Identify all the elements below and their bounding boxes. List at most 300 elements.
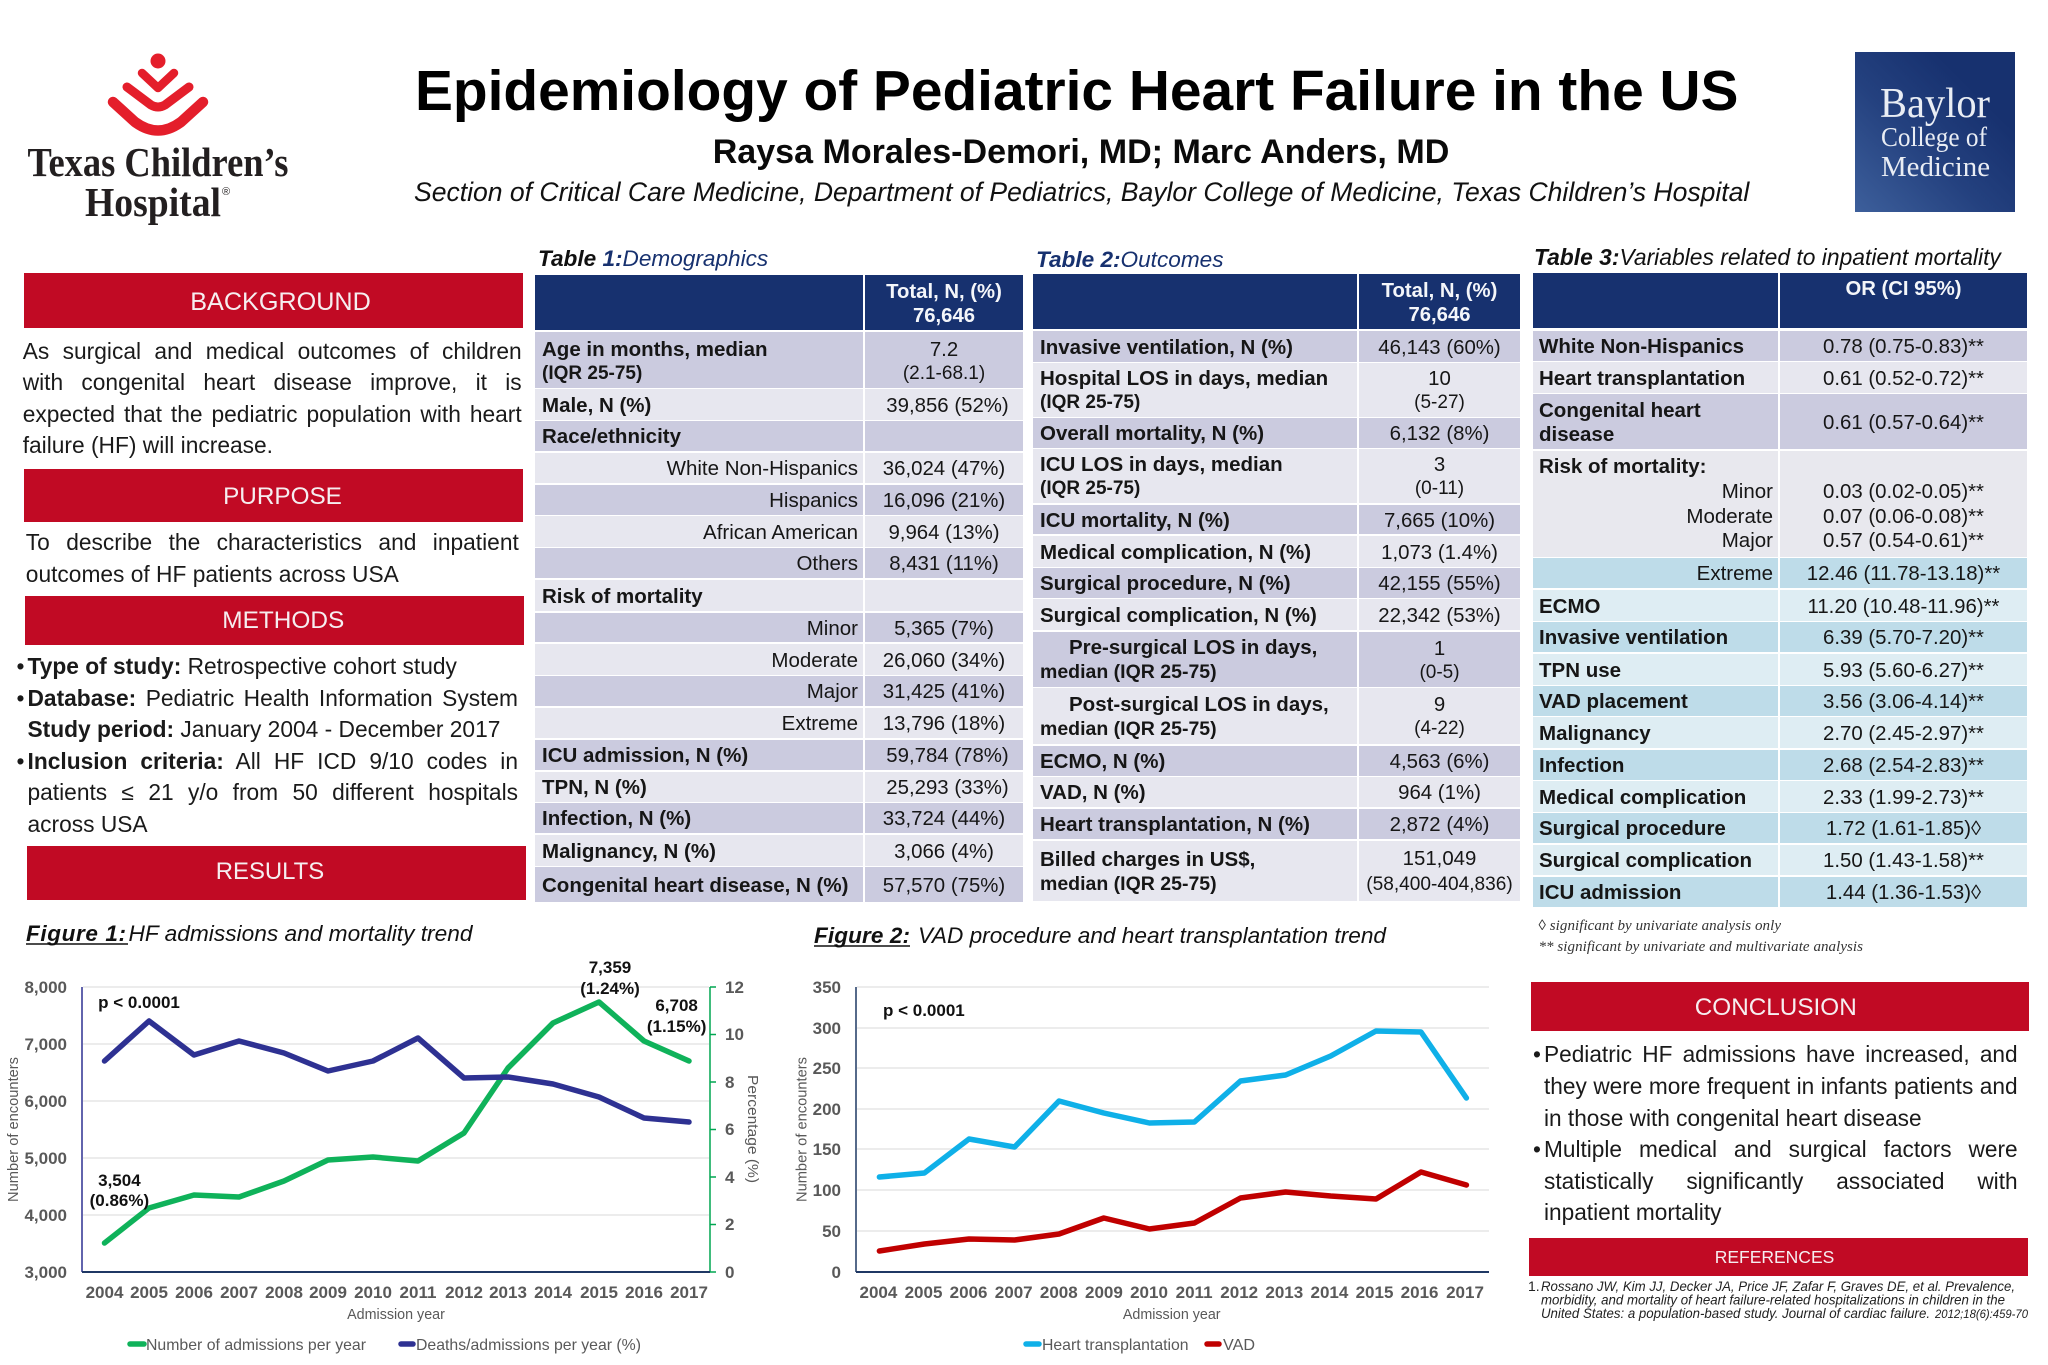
- row: hospital los: (5-27): [1414, 392, 1465, 413]
- text block: purpose: [26, 529, 519, 587]
- row: malignancy: 3,066 (4%): [894, 840, 994, 862]
- row: medical complication: 1,073 (1.4%): [1381, 542, 1498, 564]
- text block: background: expected that the pediatric population with heart: [23, 401, 522, 427]
- figure 2 title: Figure 2:: [814, 923, 910, 948]
- x axis: 2015: [580, 1283, 618, 1302]
- x axis: 2010: [354, 1283, 392, 1302]
- section heading: references: [1529, 1238, 2028, 1276]
- row: icu admission: ICU admission: [1539, 881, 1681, 904]
- x axis: 2013: [489, 1283, 527, 1302]
- row: pre-surgical los: 1: [1434, 638, 1445, 660]
- row: surgical complication: [1533, 845, 2027, 875]
- row: invasive ventilation: 46,143 (60%): [1378, 336, 1501, 358]
- row: icu los: (IQR 25-75): [1040, 478, 1140, 499]
- row: tpn: 25,293 (33%): [886, 777, 1009, 799]
- legend: [130, 1337, 641, 1354]
- y axis: 250: [813, 1059, 841, 1078]
- left axis: 6,000: [24, 1092, 67, 1111]
- row: white non-hispanics: White Non-Hispanics: [667, 457, 858, 480]
- logo: Baylor College of Medicine: [1855, 52, 2015, 212]
- right axis: 6: [725, 1120, 734, 1139]
- logo: Texas Children's Hospital: Texas Children’s: [28, 139, 288, 185]
- row: vad placement: VAD placement: [1539, 690, 1688, 713]
- row: risk of mortality: 0.07 (0.06-0.08)**: [1823, 506, 1984, 528]
- row: surgical complication: 22,342 (53%): [1378, 604, 1501, 626]
- annotations: [90, 958, 706, 1210]
- left axis: 5,000: [24, 1149, 67, 1168]
- logo: Baylor College of Medicine: Baylor: [1880, 81, 1990, 127]
- row: surgical complication: 1.50 (1.43-1.58)**: [1823, 850, 1984, 872]
- row: medical complication: 2.33 (1.99-2.73)**: [1823, 786, 1984, 808]
- row: malignancy: [1533, 717, 2027, 748]
- row: congenital heart disease: [535, 867, 1023, 902]
- row: post-surgical los: 9: [1434, 694, 1445, 716]
- chart: figure 2 VAD and heart transplantation: [785, 960, 1500, 1360]
- row: pre-surgical los: Pre-surgical LOS in days,: [1069, 636, 1317, 659]
- x axis: 2007: [995, 1283, 1033, 1302]
- row: post-surgical los: [1033, 688, 1520, 744]
- section heading: references: REFERENCES: [1715, 1247, 1834, 1267]
- logo: Texas Children's Hospital: [28, 54, 288, 225]
- x axis: 2004: [86, 1283, 124, 1302]
- row: major: 31,425 (41%): [883, 681, 1005, 703]
- row: congenital heart disease: 57,570 (75%): [883, 874, 1005, 896]
- left axis: 7,000: [24, 1035, 67, 1054]
- text block: methods: patients ≤ 21 y/o from 50 different hospitals: [28, 779, 518, 805]
- table 3: variables related to inpatient mortality: [1533, 273, 2027, 907]
- row: others: 8,431 (11%): [889, 553, 999, 575]
- x axis: 2008: [265, 1283, 303, 1302]
- text: •: [1533, 1136, 1541, 1162]
- annotations: 6,708: [655, 996, 698, 1015]
- row: white non-hispanics: White Non-Hispanics: [1539, 335, 1744, 358]
- row: risk of mortality: [1533, 451, 2027, 557]
- right axis: 4: [725, 1168, 735, 1187]
- row: surgical procedure: Surgical procedure, N (%): [1040, 572, 1291, 595]
- p value: p < 0.0001: [883, 1001, 965, 1020]
- row: risk of mortality: Risk of mortality: [542, 584, 703, 608]
- row: icu los: [1033, 449, 1520, 503]
- y axis: 200: [813, 1100, 841, 1119]
- row: infection: Infection, N (%): [542, 807, 691, 830]
- figure 1 title: [24, 918, 479, 950]
- row: risk of mortality: Risk of mortality:: [1539, 455, 1706, 478]
- row: hispanics: [535, 485, 1023, 515]
- x axis: 2016: [625, 1283, 663, 1302]
- row: invasive ventilation: [1533, 622, 2027, 652]
- x axis: 2012: [445, 1283, 483, 1302]
- x axis: 2013: [1265, 1283, 1303, 1302]
- row: extreme: Extreme: [782, 712, 858, 735]
- references text: morbidity, and mortality of heart failure-related hospitalizations in children in the: [1541, 1292, 2005, 1308]
- section heading: conclusion: [1530, 982, 2029, 1031]
- x axis: 2014: [1310, 1283, 1349, 1302]
- logo: Baylor College of Medicine: Medicine: [1881, 151, 1990, 183]
- row: ecmo: 4,563 (6%): [1390, 751, 1489, 773]
- row: white non-hispanics: [535, 453, 1023, 483]
- row: age: [535, 332, 1023, 388]
- text block: background: failure (HF) will increase.: [23, 432, 273, 458]
- row: surgical procedure: 1.72 (1.61-1.85)◊: [1826, 818, 1981, 840]
- axis titles: Percentage (%): [744, 1075, 761, 1183]
- legend: Number of admissions per year: [146, 1337, 366, 1354]
- row: minor: [535, 613, 1023, 642]
- row: race/ethnicity: Race/ethnicity: [542, 425, 681, 448]
- row: infection: 2.68 (2.54-2.83)**: [1823, 755, 1984, 777]
- axis titles: [795, 1057, 1221, 1323]
- row: overall mortality: 6,132 (8%): [1390, 423, 1489, 445]
- table 3 header: OR (CI 95%): [1845, 278, 1962, 300]
- row: tpn use: 5.93 (5.60-6.27)**: [1823, 660, 1984, 682]
- x axis: 2008: [1040, 1283, 1078, 1302]
- y axis: 50: [822, 1222, 841, 1241]
- row: icu los: (0-11): [1415, 478, 1464, 499]
- row: white non-hispanics: 0.78 (0.75-0.83)**: [1823, 336, 1984, 358]
- row: medical complication: [1033, 536, 1520, 567]
- row: billed charges: [1033, 841, 1520, 901]
- row: icu los: ICU LOS in days, median: [1040, 453, 1283, 476]
- row: hispanics: Hispanics: [769, 489, 858, 512]
- text block: conclusion: Multiple medical and surgical factors were: [1544, 1136, 2018, 1162]
- annotations: (1.24%): [580, 979, 640, 998]
- text: •: [16, 685, 24, 711]
- row: african american: [535, 516, 1023, 547]
- row: moderate: Moderate: [771, 648, 858, 672]
- title: Epidemiology of Pediatric Heart Failure in the US: [415, 60, 1738, 123]
- line: heart transplantation: [879, 1031, 1466, 1177]
- x axis: 2014: [534, 1283, 572, 1302]
- text block: conclusion: [1544, 1039, 2018, 1229]
- figure 2 title: VAD procedure and heart transplantation trend: [918, 923, 1387, 948]
- row: tpn: [535, 772, 1023, 802]
- row: medical complication: [1533, 781, 2027, 812]
- table 3 footnotes: [1535, 913, 1870, 959]
- axis titles: Number of encounters: [795, 1057, 811, 1202]
- x axis: 2017: [670, 1283, 708, 1302]
- row: male: Male, N (%): [542, 394, 651, 416]
- row: billed charges: median (IQR 25-75): [1040, 873, 1217, 895]
- table 2 header: [1033, 274, 1520, 329]
- row: heart transplantation: [1533, 362, 2027, 393]
- x axis: 2011: [1176, 1283, 1213, 1302]
- row: risk of mortality: Major: [1722, 529, 1773, 552]
- text block: methods: Inclusion criteria: All HF ICD 9/10 codes in: [28, 748, 518, 774]
- table 3 title: Table 3:Variables related to inpatient mortality: [1534, 244, 2001, 270]
- x axis: 2015: [1356, 1283, 1393, 1302]
- references text: 2012;18(6):459-70: [1934, 1309, 2029, 1321]
- row: malignancy: 2.70 (2.45-2.97)**: [1823, 722, 1984, 744]
- row: ecmo: [1033, 746, 1520, 776]
- row: tpn use: TPN use: [1539, 658, 1621, 682]
- axis titles: [6, 1057, 761, 1323]
- annotations: 3,504: [98, 1171, 141, 1190]
- text block: conclusion: statistically significantly associated with: [1544, 1168, 2018, 1194]
- section heading: methods: [25, 596, 524, 645]
- logo: Texas Children's Hospital: Hospital: [85, 179, 221, 225]
- row: hospital los: (IQR 25-75): [1040, 392, 1140, 413]
- y axis: 150: [813, 1140, 841, 1159]
- text block: conclusion: they were more frequent in infants patients and: [1544, 1073, 2018, 1099]
- section heading: background: BACKGROUND: [190, 288, 371, 316]
- x axis: 2011: [400, 1283, 436, 1302]
- x axis: 2004: [859, 1283, 898, 1302]
- row: african american: 9,964 (13%): [888, 522, 1000, 544]
- row: african american: African American: [703, 520, 858, 544]
- right axis: 8: [725, 1073, 734, 1092]
- row: age: Age in months, median: [542, 338, 768, 360]
- y axis: [813, 978, 856, 1282]
- row: icu los: 3: [1434, 454, 1445, 476]
- table 1: demographics: [535, 275, 1023, 902]
- row: risk of mortality: [535, 580, 1023, 611]
- row: heart transplantation: Heart transplantation: [1539, 366, 1745, 390]
- annotations: (0.86%): [90, 1191, 149, 1210]
- annotations: (1.15%): [647, 1017, 706, 1036]
- affiliation: Section of Critical Care Medicine, Department of Pediatrics, Baylor College of Medicine, Texas Children’s Hospital: [414, 177, 1749, 207]
- row: icu mortality: ICU mortality, N (%): [1040, 508, 1230, 532]
- row: male: 39,856 (52%): [886, 394, 1009, 416]
- annotations: p < 0.0001: [98, 993, 180, 1012]
- text block: methods: Study period: January 2004 - December 2017: [28, 716, 500, 742]
- x axis: [82, 1272, 710, 1302]
- row: others: [535, 548, 1023, 578]
- row: post-surgical los: (4-22): [1414, 718, 1465, 739]
- row: major: [535, 676, 1023, 706]
- row: surgical complication: Surgical complication: [1539, 849, 1752, 872]
- row: billed charges: 151,049: [1403, 848, 1476, 870]
- x axis: [856, 1272, 1489, 1302]
- x axis: 2005: [905, 1283, 942, 1302]
- row: congenital heart disease: Congenital heart disease, N (%): [542, 874, 848, 896]
- axis titles: Number of encounters: [6, 1057, 22, 1202]
- left axis: 8,000: [24, 978, 67, 997]
- row: heart transplantation: 0.61 (0.52-0.72)**: [1823, 368, 1984, 390]
- row: age: (IQR 25-75): [542, 362, 642, 384]
- text block: background: As surgical and medical outcomes of children: [23, 338, 522, 364]
- row: ecmo: ECMO, N (%): [1040, 750, 1165, 773]
- row: billed charges: Billed charges in US$,: [1040, 848, 1255, 871]
- table 3 footnotes: ** significant by univariate and multivariate analysis: [1538, 939, 1863, 955]
- row: surgical complication: Surgical complication, N (%): [1040, 604, 1317, 626]
- row: risk of mortality: 0.57 (0.54-0.61)**: [1823, 530, 1984, 552]
- text block: background: [22, 338, 522, 458]
- table 2: outcomes: [1033, 274, 1520, 901]
- row: infection: [1533, 750, 2027, 780]
- row: ecmo: [1533, 590, 2027, 621]
- authors: Raysa Morales-Demori, MD; Marc Anders, MD: [713, 133, 1449, 171]
- row: billed charges: (58,400-404,836): [1366, 874, 1513, 895]
- section heading: purpose: [24, 469, 523, 522]
- x axis: 2007: [220, 1283, 258, 1302]
- row: pre-surgical los: median (IQR 25-75): [1040, 661, 1217, 683]
- section heading: conclusion: CONCLUSION: [1695, 994, 1857, 1021]
- table 3 header: [1533, 273, 2027, 328]
- row: icu admission: 1.44 (1.36-1.53)◊: [1826, 882, 1981, 904]
- row: congenital heart disease: Congenital heart: [1539, 398, 1701, 422]
- row: malignancy: Malignancy: [1539, 722, 1651, 744]
- row: risk of mortality: Minor: [1722, 480, 1773, 503]
- text block: methods: Type of study: Retrospective cohort study: [28, 653, 457, 679]
- right axis: 12: [725, 978, 744, 997]
- y axis: 100: [813, 1181, 841, 1200]
- row: extreme: [1533, 558, 2027, 588]
- x axis: 2005: [130, 1283, 168, 1302]
- row: vad: 964 (1%): [1398, 782, 1481, 804]
- line: VAD: [879, 1172, 1466, 1251]
- row: major: Major: [807, 680, 858, 703]
- row: hospital los: 10: [1428, 368, 1451, 390]
- row: pre-surgical los: (0-5): [1419, 662, 1460, 682]
- right axis: [710, 978, 744, 1282]
- table 1 header: [535, 275, 1023, 330]
- y axis: 350: [813, 978, 841, 997]
- annotations: 7,359: [589, 958, 631, 977]
- row: tpn use: [1533, 654, 2027, 685]
- row: surgical procedure: [1033, 568, 1520, 598]
- left axis: [24, 978, 82, 1282]
- row: white non-hispanics: 36,024 (47%): [883, 458, 1005, 480]
- line: deaths per admissions: [104, 1021, 689, 1122]
- row: extreme: Extreme: [1697, 562, 1773, 585]
- row: surgical procedure: [1533, 813, 2027, 843]
- text block: conclusion: inpatient mortality: [1544, 1199, 1721, 1225]
- row: infection: Infection: [1539, 754, 1624, 777]
- row: heart transplantation: [1033, 809, 1520, 839]
- row: extreme: 13,796 (18%): [883, 713, 1005, 735]
- legend: Heart transplantation: [1042, 1337, 1189, 1354]
- text block: background: with congenital heart disease improve, it is: [23, 369, 522, 395]
- row: hospital los: [1033, 363, 1520, 417]
- table 1 header: Total, N, (%): [886, 280, 1002, 302]
- row: vad: VAD, N (%): [1040, 781, 1146, 804]
- row: medical complication: Medical complication, N (%): [1040, 540, 1311, 564]
- row: ecmo: 11.20 (10.48-11.96)**: [1808, 596, 1999, 618]
- x axis: 2009: [1085, 1283, 1123, 1302]
- figure 1 title: HF admissions and mortality trend: [128, 921, 474, 946]
- row: invasive ventilation: Invasive ventilation, N (%): [1040, 336, 1293, 358]
- section heading: background: [24, 273, 523, 328]
- row: invasive ventilation: 6.39 (5.70-7.20)**: [1823, 627, 1984, 649]
- row: invasive ventilation: [1033, 331, 1520, 362]
- row: age: 7.2: [930, 338, 958, 360]
- text: •: [16, 653, 24, 679]
- references text: United States: a population-based study. Journal of cardiac failure.: [1541, 1305, 1930, 1321]
- row: heart transplantation: Heart transplantation, N (%): [1040, 813, 1310, 836]
- row: ecmo: ECMO: [1539, 594, 1600, 618]
- row: infection: 33,724 (44%): [883, 808, 1005, 830]
- row: infection: [535, 803, 1023, 833]
- row: surgical procedure: Surgical procedure: [1539, 817, 1726, 840]
- text: •: [16, 748, 24, 774]
- row: vad placement: [1533, 686, 2027, 716]
- row: risk of mortality: 0.03 (0.02-0.05)**: [1823, 481, 1984, 503]
- row: post-surgical los: median (IQR 25-75): [1040, 718, 1217, 740]
- references text: Rossano JW, Kim JJ, Decker JA, Price JF, Zafar F, Graves DE, et al. Prevalence,: [1541, 1278, 2015, 1294]
- row: medical complication: Medical complication: [1539, 786, 1746, 808]
- row: others: Others: [796, 552, 858, 575]
- row: vad placement: 3.56 (3.06-4.14)**: [1823, 691, 1984, 713]
- row: age: (2.1-68.1): [903, 362, 985, 384]
- row: post-surgical los: Post-surgical LOS in days,: [1069, 693, 1329, 716]
- chart: figure 1 HF admissions and mortality: [0, 960, 770, 1360]
- table 3 footnotes: ◊ significant by univariate analysis only: [1538, 918, 1781, 934]
- row: race/ethnicity: [535, 421, 1023, 451]
- row: male: [535, 389, 1023, 420]
- x axis: 2017: [1446, 1283, 1484, 1302]
- row: white non-hispanics: [1533, 331, 2027, 361]
- row: hispanics: 16,096 (21%): [883, 490, 1005, 512]
- row: surgical complication: [1033, 599, 1520, 630]
- logo: Texas Children's Hospital: ®: [222, 186, 230, 198]
- row: malignancy: [535, 835, 1023, 866]
- line: admissions per year: [104, 1002, 689, 1243]
- table 2 title: Table 2:Outcomes: [1036, 247, 1224, 272]
- text block: conclusion: in those with congenital heart disease: [1544, 1105, 1922, 1131]
- row: icu mortality: 7,665 (10%): [1384, 510, 1495, 532]
- section heading: results: [27, 846, 526, 900]
- text block: methods: across USA: [28, 811, 148, 837]
- row: icu admission: ICU admission, N (%): [542, 744, 748, 767]
- row: overall mortality: [1033, 418, 1520, 448]
- row: extreme: [535, 708, 1023, 738]
- text block: purpose: outcomes of HF patients across USA: [26, 561, 399, 587]
- x axis: 2010: [1130, 1283, 1168, 1302]
- row: extreme: 12.46 (11.78-13.18)**: [1807, 563, 2000, 585]
- row: icu admission: 59,784 (78%): [886, 745, 1009, 767]
- row: overall mortality: Overall mortality, N (%): [1040, 422, 1264, 445]
- section heading: methods: METHODS: [222, 606, 344, 634]
- text block: methods: [16, 653, 518, 837]
- right axis: 10: [725, 1025, 744, 1044]
- table 1 header: 76,646: [913, 304, 975, 326]
- row: pre-surgical los: [1033, 632, 1520, 687]
- row: congenital heart disease: disease: [1539, 422, 1614, 446]
- axis titles: Admission year: [347, 1307, 445, 1323]
- x axis: 2006: [175, 1283, 213, 1302]
- row: hospital los: Hospital LOS in days, median: [1040, 367, 1328, 390]
- row: icu mortality: [1033, 505, 1520, 534]
- row: congenital heart disease: 0.61 (0.57-0.64)**: [1823, 412, 1984, 434]
- figure 1 title: Figure 1:: [26, 921, 126, 946]
- row: surgical procedure: 42,155 (55%): [1378, 573, 1501, 595]
- text: •: [1533, 1041, 1541, 1067]
- row: moderate: [535, 644, 1023, 675]
- legend: [1026, 1337, 1255, 1354]
- logo: Baylor College of Medicine: College of: [1881, 122, 1987, 152]
- y axis: 0: [832, 1263, 841, 1282]
- row: risk of mortality: Moderate: [1686, 504, 1773, 528]
- table 2 header: 76,646: [1408, 304, 1471, 326]
- y axis: 300: [813, 1019, 841, 1038]
- text block: purpose: To describe the characteristics and inpatient: [26, 529, 519, 555]
- legend: Deaths/admissions per year (%): [416, 1337, 641, 1354]
- row: icu admission: [535, 740, 1023, 770]
- section heading: results: RESULTS: [216, 858, 324, 885]
- section heading: purpose: PURPOSE: [223, 483, 342, 510]
- x axis: 2012: [1220, 1283, 1258, 1302]
- references text: [1525, 1278, 2033, 1324]
- text block: conclusion: Pediatric HF admissions have increased, and: [1544, 1041, 2018, 1067]
- row: malignancy: Malignancy, N (%): [542, 840, 716, 862]
- row: moderate: 26,060 (34%): [883, 650, 1005, 672]
- row: icu admission: [1533, 877, 2027, 907]
- legend: VAD: [1223, 1337, 1255, 1354]
- row: invasive ventilation: Invasive ventilation: [1539, 626, 1728, 649]
- x axis: 2009: [309, 1283, 347, 1302]
- x axis: 2016: [1401, 1283, 1439, 1302]
- right axis: 0: [725, 1263, 734, 1282]
- figure 2 title: [812, 920, 1392, 952]
